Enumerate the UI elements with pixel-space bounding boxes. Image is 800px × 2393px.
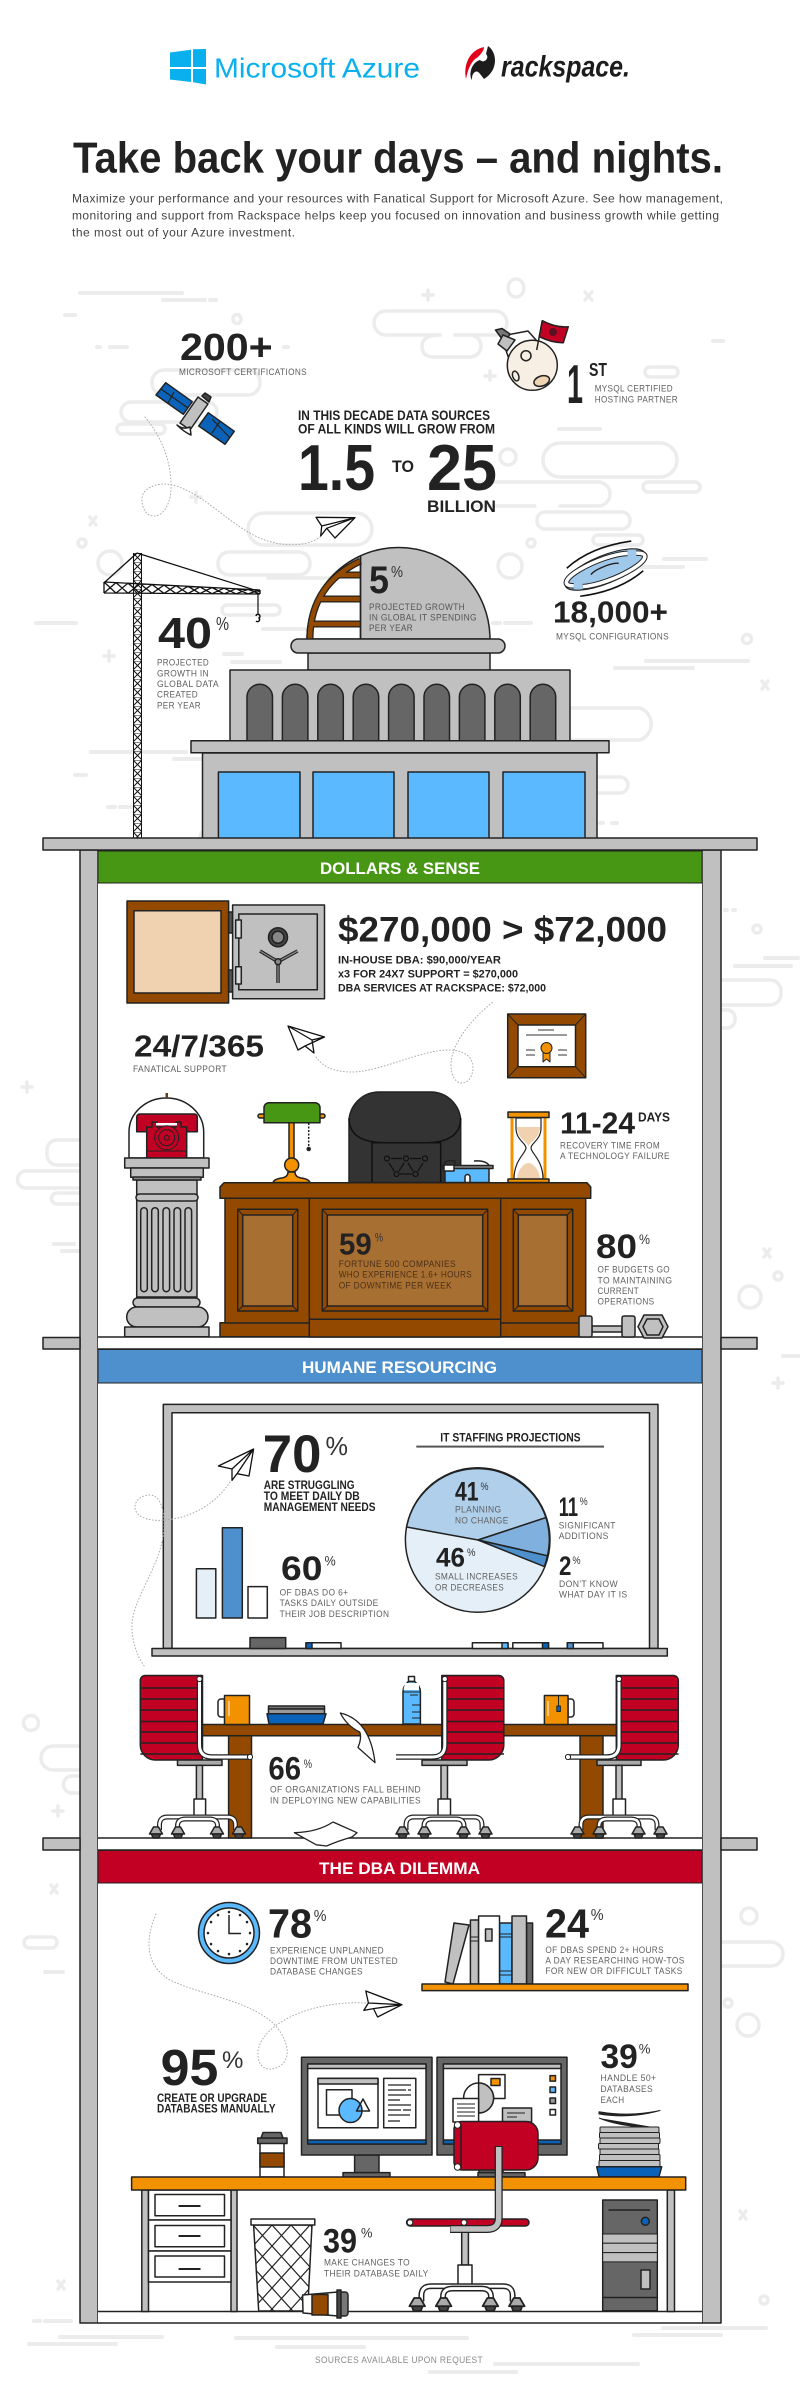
stat: 39 percent changes daily: MAKE CHANGES TO xyxy=(324,2258,410,2268)
icon: paper stack xyxy=(597,2110,662,2177)
stat: data sources: BILLION xyxy=(427,497,496,516)
stat: 5 percent: % xyxy=(391,564,403,581)
stat: 70 percent: MANAGEMENT NEEDS xyxy=(264,1502,376,1514)
stat: 1st MySQL partner: ST xyxy=(589,360,607,380)
stat: 95 percent: % xyxy=(222,2047,243,2074)
pie label: 11 percent: SIGNIFICANT xyxy=(559,1520,616,1530)
pie label: 41 percent: % xyxy=(480,1481,489,1493)
icon: paper plane 2 xyxy=(288,1026,324,1053)
stat: recovery time: A TECHNOLOGY FAILURE xyxy=(560,1151,670,1161)
stat: 66 percent xyxy=(268,1751,421,1805)
building: dome observatory xyxy=(191,548,609,839)
icon: coffee cup xyxy=(258,2132,287,2177)
stat: 39 percent handle databases: HANDLE 50+ xyxy=(600,2073,656,2083)
stat: 59 percent: WHO EXPERIENCE 1.6+ HOURS xyxy=(339,1270,472,1280)
icon: open safe xyxy=(127,901,324,1003)
logo: rackspace: rackspace. xyxy=(501,50,630,84)
heading: IT staffing projections: IT STAFFING PROJECTIONS xyxy=(440,1433,581,1445)
stat: 5 percent: IN GLOBAL IT SPENDING xyxy=(369,612,477,622)
stat: 95 percent: DATABASES MANUALLY xyxy=(157,2102,276,2116)
stat: 40 percent: % xyxy=(216,614,229,634)
section banner: dollars and sense: DOLLARS & SENSE xyxy=(320,859,480,878)
red chair centre xyxy=(396,1676,504,1838)
stat: 1st MySQL partner: 1 xyxy=(567,353,583,415)
stat: 200+ certifications xyxy=(179,327,307,377)
dotted flight path 1 xyxy=(142,417,320,545)
dotted flight path 3 xyxy=(132,1482,230,1667)
icon: right monitor xyxy=(437,2057,567,2177)
stat: 39 percent handle databases: DATABASES xyxy=(600,2084,653,2094)
stat: 70 percent: 70 xyxy=(263,1425,321,1484)
stat: 66 percent: 66 xyxy=(268,1751,301,1787)
stat: 78 percent: 78 xyxy=(268,1901,312,1947)
icon: paper on floor xyxy=(294,1822,357,1846)
stat: data sources: OF ALL KINDS WILL GROW FROM xyxy=(298,421,495,436)
icon: dumbbell xyxy=(579,1315,668,1338)
section banner: the dba dilemma: THE DBA DILEMMA xyxy=(319,1859,480,1878)
stat: 5 percent: PER YEAR xyxy=(369,623,413,633)
stat: data sources xyxy=(298,408,497,516)
icon: framed certificate xyxy=(508,1014,586,1078)
stat: 80 percent: 80 xyxy=(596,1228,637,1266)
icon: left monitor xyxy=(302,2057,432,2177)
intro text: monitoring and support from Rackspace helps keep you focused on innovation and business growth while getting xyxy=(72,209,719,223)
pie label: 41 percent: NO CHANGE xyxy=(455,1515,509,1525)
pie label: 11 percent: 11 xyxy=(559,1492,578,1522)
pie label: 46 percent: SMALL INCREASES xyxy=(435,1572,518,1582)
stat: 60 percent: THEIR JOB DESCRIPTION xyxy=(280,1609,389,1619)
stat: 78 percent: DOWNTIME FROM UNTESTED xyxy=(270,1956,398,1966)
icon: paper plane 4 xyxy=(364,1991,402,2017)
icon: paper plane 3 xyxy=(218,1449,254,1480)
pie label: 2 percent: WHAT DAY IT IS xyxy=(559,1590,628,1600)
stat: 39 percent changes daily: % xyxy=(361,2224,372,2240)
section banner: humane resourcing xyxy=(98,1350,702,1383)
stat: 60 percent: TASKS DAILY OUTSIDE xyxy=(280,1598,379,1608)
stat: 80 percent: % xyxy=(639,1231,650,1247)
stat: 24 percent: 24 xyxy=(545,1901,589,1947)
pie label: 11 percent: % xyxy=(580,1496,588,1508)
red chair right xyxy=(565,1676,679,1838)
stat: 40 percent: PROJECTED xyxy=(157,658,209,668)
icon: computer tower xyxy=(603,2200,657,2311)
logo: rackspace xyxy=(465,46,630,84)
intro text xyxy=(72,192,723,240)
stat: 270,000 versus 72,000: x3 FOR 24X7 SUPPORT = $270,000 xyxy=(338,968,518,980)
stat: 18,000+ configurations: MYSQL CONFIGURATIONS xyxy=(556,631,669,641)
stat: 1st MySQL partner xyxy=(567,353,678,415)
stat: 1st MySQL partner: HOSTING PARTNER xyxy=(595,394,678,404)
dotted flight path 2 xyxy=(316,1002,493,1083)
stat: 39 percent changes daily: THEIR DATABASE DAILY xyxy=(324,2268,429,2278)
pie label: 46 percent: % xyxy=(467,1547,476,1559)
stat: 95 percent: 95 xyxy=(161,2039,218,2096)
section banner: the dba dilemma xyxy=(98,1850,702,1883)
stat: 80 percent: TO MAINTAINING xyxy=(598,1275,672,1285)
pie label: 46 percent: OR DECREASES xyxy=(435,1582,504,1592)
icon: books on shelf xyxy=(422,1916,688,1991)
pie label: 2 percent: DON'T KNOW xyxy=(559,1579,618,1589)
stat: fanatical support: 24/7/365 xyxy=(134,1029,264,1064)
icon: windows flag xyxy=(170,49,206,84)
stat: 24 percent: A DAY RESEARCHING HOW-TOS xyxy=(545,1956,685,1966)
icon: banker lamp xyxy=(258,1103,325,1182)
stat: 24 percent: % xyxy=(591,1907,604,1924)
stat: 78 percent: % xyxy=(314,1908,326,1925)
stat: 39 percent handle databases: 39 xyxy=(600,2038,638,2076)
stat: 5 percent: 5 xyxy=(369,559,389,602)
stat: 59 percent: 59 xyxy=(339,1226,372,1261)
bar chart xyxy=(196,1528,267,1618)
pie label: 46 percent: 46 xyxy=(436,1543,465,1573)
stat: 59 percent: OF DOWNTIME PER WEEK xyxy=(339,1280,452,1290)
icon: wooden desk xyxy=(220,1183,591,1337)
stat: 39 percent handle databases: EACH xyxy=(600,2095,624,2105)
stat: 60 percent xyxy=(280,1550,389,1619)
stat: 59 percent: FORTUNE 500 COMPANIES xyxy=(339,1259,456,1269)
stat: recovery time: DAYS xyxy=(638,1110,670,1125)
pie chart xyxy=(405,1468,550,1612)
crane xyxy=(104,553,260,838)
icon: rackspace mark xyxy=(465,46,495,80)
arcade storey xyxy=(230,670,570,741)
icon: falling paper xyxy=(340,1713,375,1763)
pie label: 41 percent: PLANNING xyxy=(455,1505,502,1515)
window storey xyxy=(191,741,609,839)
pie label: 2 percent: % xyxy=(572,1555,581,1567)
pie label: 11 percent: ADDITIONS xyxy=(559,1531,609,1541)
building shell: columns and floors xyxy=(43,838,757,2323)
stat: 40 percent: CREATED xyxy=(157,690,198,700)
stat: 66 percent: OF ORGANIZATIONS FALL BEHIND xyxy=(270,1784,421,1794)
stat: 70 percent: ARE STRUGGLING xyxy=(264,1480,355,1492)
intro text: the most out of your Azure investment. xyxy=(72,226,295,240)
computer desk xyxy=(132,2177,686,2312)
icon: mug right xyxy=(544,1696,574,1724)
icon: desk tray xyxy=(443,1161,493,1182)
stat: 60 percent: 60 xyxy=(281,1550,322,1588)
icon: paper plane 1 xyxy=(316,517,355,538)
pie label: 41 percent: 41 xyxy=(455,1477,479,1507)
stat: 24 percent xyxy=(545,1901,685,1976)
stat: 39 percent handle databases xyxy=(600,2038,656,2105)
icon: executive chair xyxy=(349,1092,461,1182)
dome xyxy=(307,548,490,639)
stat: data sources: 25 xyxy=(427,431,497,504)
stat: 80 percent xyxy=(596,1228,672,1307)
stat: 70 percent: % xyxy=(326,1431,348,1461)
stat: 60 percent: OF DBAS DO 6+ xyxy=(280,1587,348,1597)
stat: 40 percent: GLOBAL DATA xyxy=(157,679,219,689)
stat: 80 percent: OF BUDGETS GO xyxy=(598,1265,670,1275)
stat: 24 percent: OF DBAS SPEND 2+ HOURS xyxy=(545,1945,664,1955)
icon: paper tray on table xyxy=(267,1706,326,1724)
stat: 39 percent handle databases: % xyxy=(639,2040,650,2056)
stat: 40 percent: 40 xyxy=(158,609,212,658)
stat: 270,000 versus 72,000 xyxy=(338,911,667,994)
icon: wall clock xyxy=(198,1902,260,1964)
stat: 66 percent: IN DEPLOYING NEW CAPABILITIES xyxy=(270,1795,421,1805)
section banner: humane resourcing: HUMANE RESOURCING xyxy=(302,1358,497,1377)
icon: red phone under glass on column xyxy=(125,1093,209,1337)
stat: 200+ certifications: MICROSOFT CERTIFICATIONS xyxy=(179,367,307,377)
stat: 1st MySQL partner: MYSQL CERTIFIED xyxy=(595,384,673,394)
logo: Microsoft Azure xyxy=(170,49,420,84)
stat: 39 percent changes daily: 39 xyxy=(323,2223,357,2261)
stat: 60 percent: % xyxy=(324,1553,336,1569)
stat: 40 percent xyxy=(157,609,229,710)
stat: 70 percent xyxy=(263,1425,376,1514)
stat: 78 percent: EXPERIENCE UNPLANNED xyxy=(270,1946,384,1956)
icon: mug left xyxy=(218,1696,250,1724)
stat: 66 percent: % xyxy=(304,1757,312,1771)
icon: moon with flag xyxy=(496,321,568,390)
title: Take back your days – and nights. xyxy=(73,134,723,182)
footer: sources note: SOURCES AVAILABLE UPON REQUEST xyxy=(315,2355,483,2365)
stat: data sources: 1.5 xyxy=(298,431,375,504)
intro text: Maximize your performance and your resources with Fanatical Support for Microsoft Azure. See how management, xyxy=(72,192,723,206)
meeting table xyxy=(202,1724,617,1838)
stat: 39 percent changes daily xyxy=(323,2223,429,2278)
stat: 40 percent: PER YEAR xyxy=(157,700,201,710)
stat: 78 percent xyxy=(268,1901,398,1977)
stat: data sources: IN THIS DECADE DATA SOURCES xyxy=(298,408,490,423)
stat: 18,000+ configurations: 18,000+ xyxy=(553,595,668,630)
pie label: 2 percent: 2 xyxy=(559,1551,571,1581)
stat: 78 percent: DATABASE CHANGES xyxy=(270,1967,363,1977)
icon: galaxy xyxy=(557,534,653,605)
icon: hourglass xyxy=(508,1112,549,1182)
stat: recovery time xyxy=(560,1105,670,1161)
stat: 5 percent: PROJECTED GROWTH xyxy=(369,602,465,612)
stat: 80 percent: CURRENT xyxy=(598,1286,639,1296)
icon: spilled coffee cup xyxy=(303,2290,348,2318)
stat: fanatical support: FANATICAL SUPPORT xyxy=(133,1064,227,1074)
stat: 200+ certifications: 200+ xyxy=(180,327,273,369)
pie label: 46 percent xyxy=(435,1543,518,1592)
dotted flight path 4 xyxy=(149,1914,366,2069)
stat: data sources: TO xyxy=(392,457,414,476)
whiteboard xyxy=(152,1404,667,1656)
stat: 270,000 versus 72,000: $270,000 > $72,000 xyxy=(338,911,667,950)
stat: 40 percent: GROWTH IN xyxy=(157,668,209,678)
stat: 270,000 versus 72,000: IN-HOUSE DBA: $90,000/YEAR xyxy=(338,954,501,966)
stat: 70 percent: TO MEET DAILY DB xyxy=(264,1491,360,1503)
stat: 80 percent: OPERATIONS xyxy=(598,1297,654,1307)
icon: waste basket xyxy=(251,2219,315,2311)
stat: 95 percent xyxy=(157,2039,276,2116)
pie label: 2 percent xyxy=(559,1551,628,1600)
red chair left xyxy=(140,1675,253,1838)
icon: satellite xyxy=(156,383,234,444)
pie label: 41 percent xyxy=(455,1477,509,1525)
pie label: 11 percent xyxy=(559,1492,616,1541)
stat: 270,000 versus 72,000: DBA SERVICES AT RACKSPACE: $72,000 xyxy=(338,982,546,994)
stat: 59 percent xyxy=(339,1226,472,1290)
dome ring xyxy=(308,653,490,670)
icon: desk chair xyxy=(407,2122,538,2311)
stat: 59 percent: % xyxy=(375,1231,383,1245)
stat: recovery time: 11-24 xyxy=(560,1105,636,1140)
logo: Microsoft Azure: Microsoft Azure xyxy=(214,52,420,84)
stat: 95 percent: CREATE OR UPGRADE xyxy=(157,2091,267,2105)
icon: water bottle xyxy=(403,1676,420,1724)
stat: 24 percent: FOR NEW OR DIFFICULT TASKS xyxy=(545,1966,683,1976)
stat: recovery time: RECOVERY TIME FROM xyxy=(560,1140,660,1150)
stat: 5 percent xyxy=(369,559,477,633)
section banner: dollars and sense xyxy=(98,851,702,883)
